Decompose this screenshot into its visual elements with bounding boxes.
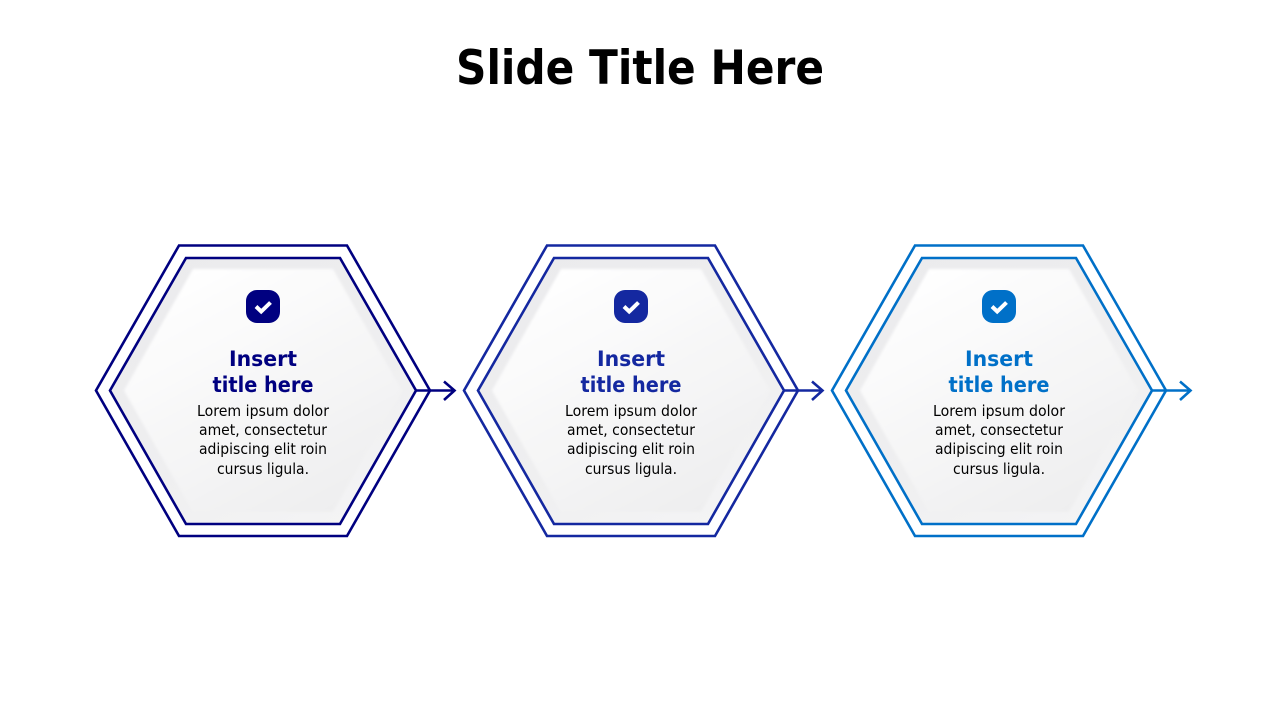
step body text: amet, consectetur [199,421,328,439]
panel: step 2 hexagon [464,246,822,536]
step heading: Insert [965,347,1033,371]
step heading [212,347,314,397]
step body text: Lorem ipsum dolor [197,402,330,420]
title: Slide Title Here [456,41,824,96]
arrow [1152,382,1190,400]
step body text: Lorem ipsum dolor [933,402,1066,420]
hexagon outlines [832,246,1166,536]
step body text: amet, consectetur [567,421,696,439]
hexagon face [110,258,416,524]
step body text: adipiscing elit roin [567,440,695,458]
hexagon face [478,258,784,524]
arrow [784,382,822,400]
hexagon face [846,258,1152,524]
arrow [416,382,454,400]
step heading [948,347,1050,397]
step body text [197,402,330,478]
step body text [933,402,1066,478]
step body text: Lorem ipsum dolor [565,402,698,420]
step body text [565,402,698,478]
icon: check badge [614,290,648,323]
step body text: amet, consectetur [935,421,1064,439]
hexagon outlines [464,246,798,536]
step body text: cursus ligula. [217,460,309,478]
panel: step 3 hexagon [832,246,1190,536]
step heading: title here [580,373,682,397]
step body text: cursus ligula. [585,460,677,478]
step heading [580,347,682,397]
hexagon outlines [96,246,430,536]
step heading: title here [212,373,314,397]
step heading: Insert [229,347,297,371]
step body text: adipiscing elit roin [199,440,327,458]
step body text: cursus ligula. [953,460,1045,478]
icon: check badge [982,290,1016,323]
step heading: title here [948,373,1050,397]
step body text: adipiscing elit roin [935,440,1063,458]
panel: step 1 hexagon [96,246,454,536]
step heading: Insert [597,347,665,371]
icon: check badge [246,290,280,323]
